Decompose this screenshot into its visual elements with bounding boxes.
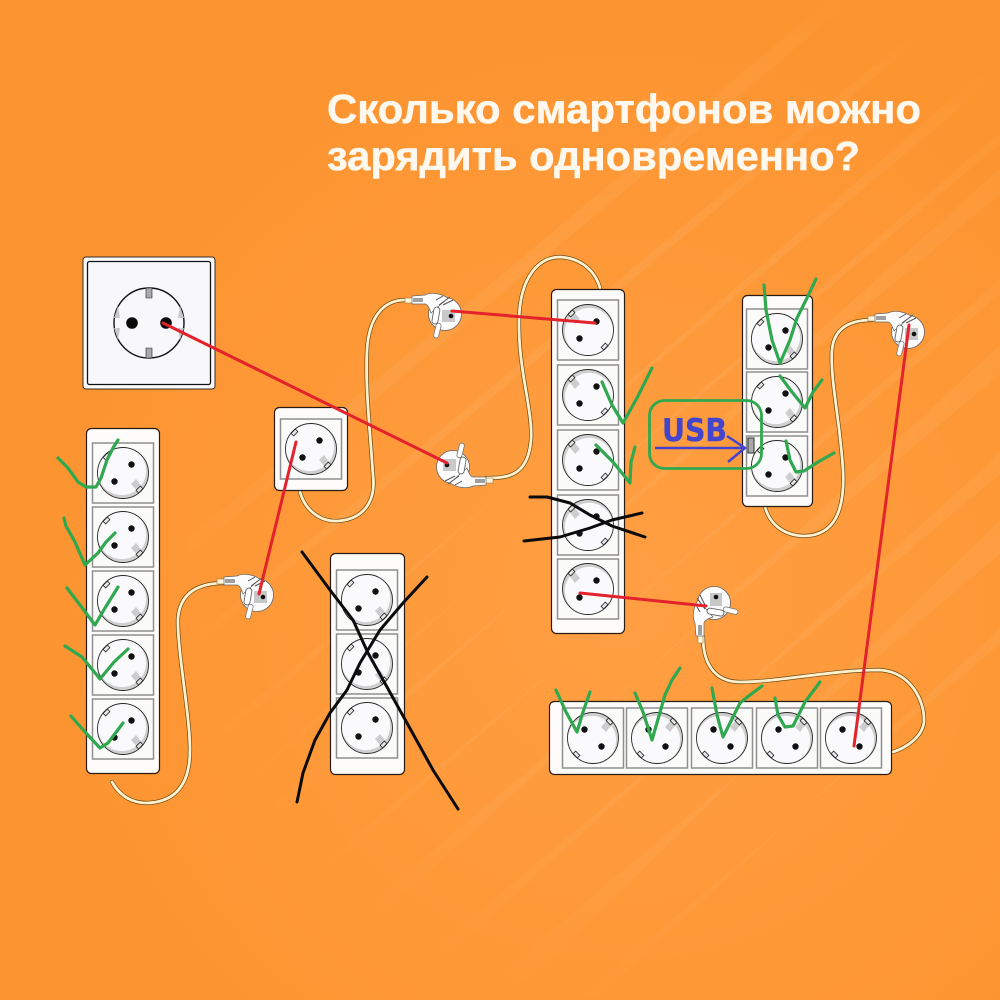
title: зарядить одновременно? <box>327 133 860 179</box>
USB callout: USB <box>662 413 727 449</box>
title: Сколько смартфонов можно <box>327 86 921 132</box>
power strip: left, five sockets <box>86 428 160 774</box>
power strip: horizontal, five sockets <box>550 702 892 774</box>
plug: upper <box>405 293 462 338</box>
plug: right strip <box>868 311 924 356</box>
diagonal light streaks <box>320 96 1000 830</box>
black crosses <box>297 497 645 809</box>
plug: lower centre <box>436 443 493 488</box>
power strip: crossed out, three sockets <box>330 554 404 774</box>
power strip: centre, five sockets <box>552 290 624 634</box>
small single socket <box>274 408 348 490</box>
title <box>327 86 921 179</box>
USB callout <box>650 400 762 468</box>
large wall socket <box>83 257 215 389</box>
green check marks <box>58 279 834 748</box>
cords <box>112 257 924 803</box>
power strip: right, three sockets with USB port <box>742 296 812 506</box>
red connection lines <box>163 311 909 746</box>
plug: horizontal strip <box>693 586 738 643</box>
plug: left strip <box>217 574 274 619</box>
